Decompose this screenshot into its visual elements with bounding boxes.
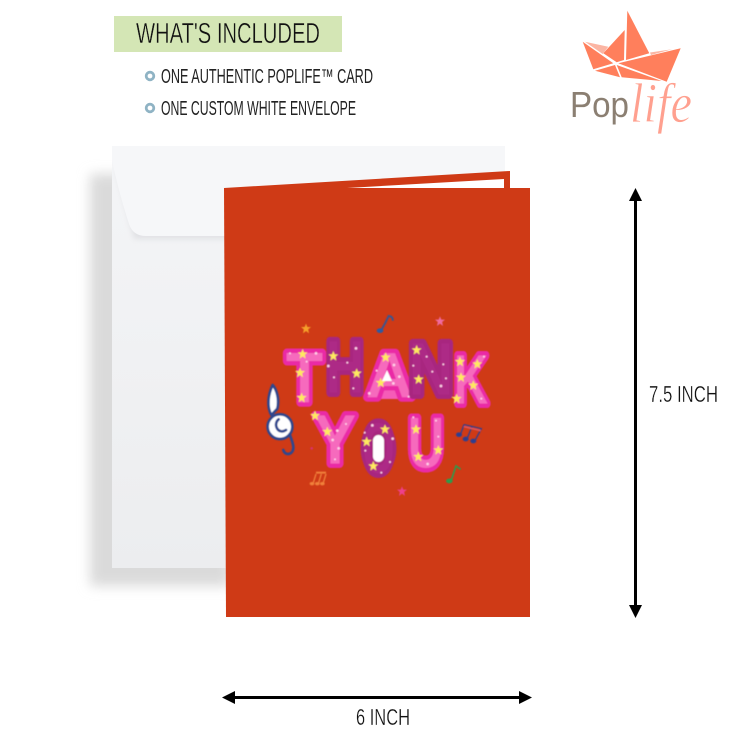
envelope flap (112, 146, 505, 236)
star top left (301, 324, 311, 333)
logo: poplife paper boat (570, 11, 692, 135)
logo: poplife paper boat: Pop (570, 84, 629, 125)
letter A: A (366, 340, 413, 412)
list: included items: ONE CUSTOM WHITE ENVELOPE (161, 98, 356, 120)
letter O: O (362, 410, 394, 489)
letter N: N (408, 328, 454, 410)
letter T: T (286, 340, 323, 418)
arrow: height dimension (629, 188, 642, 618)
label: 6 inch: 6 INCH (356, 704, 410, 730)
arrow: width dimension (222, 691, 532, 704)
list: included items: ONE AUTHENTIC POPLIFE™ CARD (161, 66, 373, 88)
card front (224, 188, 530, 617)
letter U: U (408, 404, 444, 484)
logo: poplife paper boat: life (630, 73, 692, 135)
dot left (310, 447, 313, 450)
card back edge (224, 171, 510, 190)
treble clef (268, 385, 293, 454)
card art: thank you lettering (268, 316, 488, 496)
envelope with shadow (90, 146, 505, 586)
letter H: H (326, 326, 364, 408)
decorations: stars and notes (268, 316, 485, 496)
pink dot bottom (397, 486, 407, 496)
heading: what's included: WHAT'S INCLUDED (136, 18, 320, 50)
green note (446, 466, 461, 483)
letter O (360, 410, 396, 489)
letter Y: Y (314, 400, 356, 478)
beamed notes right (457, 425, 481, 443)
small sparkle dots (289, 347, 485, 474)
yellow stars (295, 345, 482, 471)
heading: what's included (114, 16, 342, 52)
list: included items (146, 66, 373, 120)
letter K: K (454, 340, 488, 418)
pink star top right (435, 316, 445, 326)
orange notes (310, 473, 326, 485)
note top (377, 316, 393, 333)
